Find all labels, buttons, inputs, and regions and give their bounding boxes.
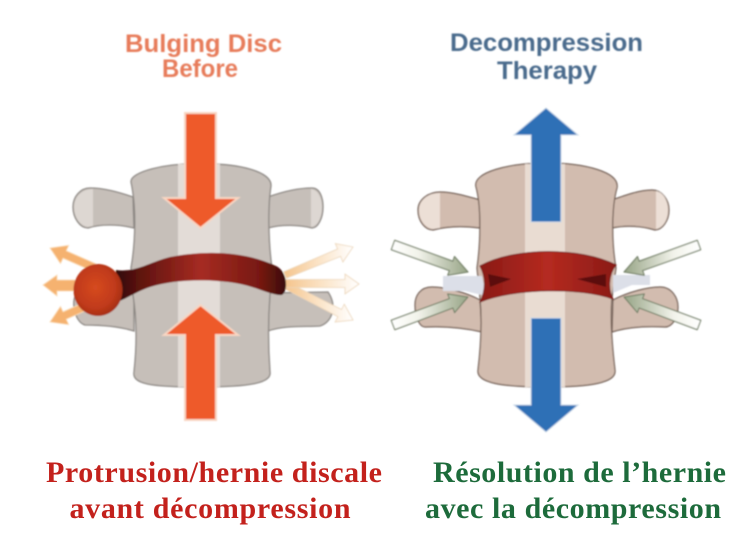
- arrows: inward right: [624, 240, 701, 330]
- title: Bulging Disc Before: Before: [162, 55, 238, 83]
- disc fluid right: [613, 275, 650, 293]
- title: Bulging Disc Before: Bulging Disc: [125, 30, 282, 58]
- disc herniation ball: [74, 264, 122, 316]
- process highlight left: [74, 189, 93, 227]
- title: Decompression Therapy: Therapy: [497, 57, 597, 85]
- central light stripe: [178, 164, 220, 387]
- caption: resolution with decompression: avec la décompression: [425, 492, 721, 525]
- disc: bulging red disc: [116, 253, 286, 302]
- caption: protrusion before decompression: [46, 456, 382, 525]
- process highlight left: [419, 193, 440, 229]
- disc dark inner marks: [488, 274, 606, 287]
- title: Bulging Disc Before: [125, 30, 282, 83]
- arrows: right bulge pressure: [283, 244, 359, 322]
- process highlight right: [311, 189, 322, 227]
- arrow: traction up: [514, 108, 578, 222]
- vertebrae: decompressed spine: [415, 163, 678, 387]
- panel: bulging disc illustration: [43, 113, 359, 420]
- vertebrae: compressed spine: [73, 164, 333, 387]
- caption: resolution with decompression: [425, 456, 726, 525]
- central light stripe: [525, 164, 565, 387]
- disc fluid left: [443, 276, 486, 296]
- disc: restored red disc: [480, 252, 616, 302]
- title: Decompression Therapy: Decompression: [450, 29, 643, 57]
- title: Decompression Therapy: [450, 29, 643, 85]
- arrows: left bulge pressure: [43, 245, 102, 325]
- arrow: traction down: [514, 318, 578, 432]
- caption: resolution with decompression: Résolution de l’hernie: [433, 456, 726, 489]
- arrow: compression down: [164, 113, 238, 228]
- caption: protrusion before decompression: Protrusion/hernie discale: [46, 456, 382, 489]
- process highlight right: [656, 191, 668, 229]
- panel: decompression illustration: [391, 108, 701, 432]
- arrow: compression up: [164, 305, 238, 420]
- caption: protrusion before decompression: avant décompression: [70, 492, 351, 525]
- arrows: inward left: [391, 240, 468, 330]
